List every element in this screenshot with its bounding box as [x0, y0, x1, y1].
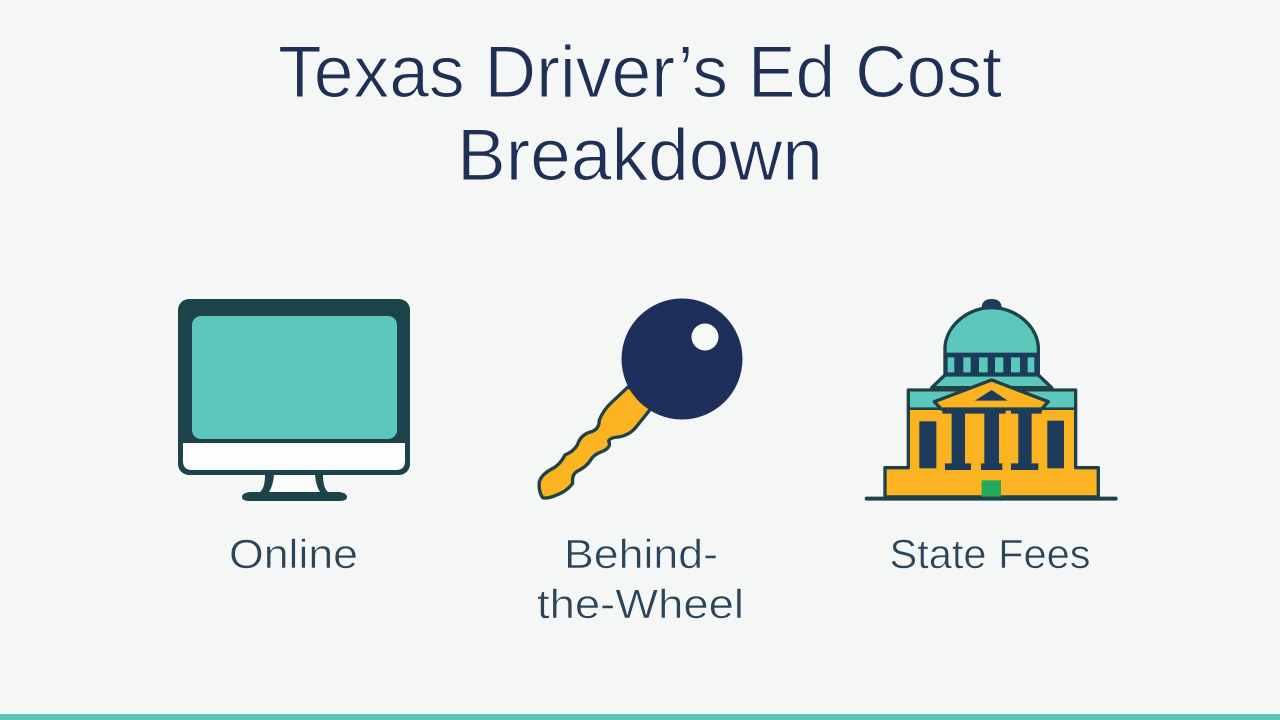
capitol pediment — [934, 380, 1048, 409]
capitol columns and windows — [942, 409, 1042, 470]
capitol base and walls — [885, 390, 1098, 497]
label: Behind-the-Wheel — [537, 531, 744, 627]
title: Texas Driver’s Ed Cost — [278, 32, 1002, 113]
icon: state capitol building — [867, 299, 1116, 499]
capitol dome — [945, 308, 1038, 373]
title: Breakdown — [457, 115, 823, 196]
label: Behind-the-Wheel: the-Wheel — [537, 581, 744, 627]
footer bar — [0, 714, 1280, 720]
label: Online: Online — [229, 531, 358, 577]
icon: key — [539, 298, 742, 498]
title — [278, 32, 1002, 196]
label: Behind-the-Wheel: Behind- — [564, 531, 718, 577]
label: State Fees: State Fees — [890, 531, 1090, 577]
icon: computer monitor — [178, 299, 410, 501]
